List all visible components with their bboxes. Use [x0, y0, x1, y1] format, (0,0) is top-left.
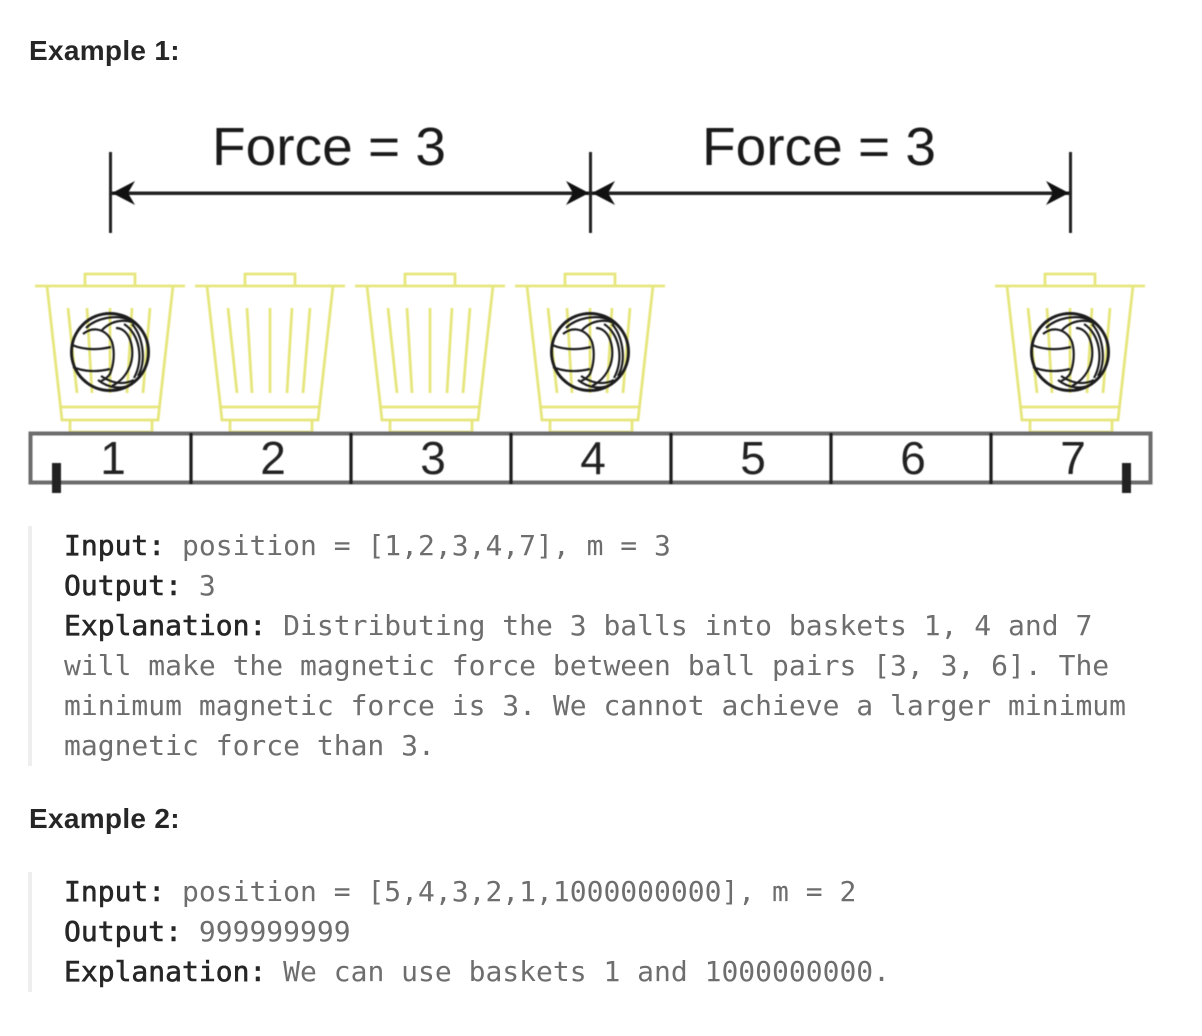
icon: ball in basket 7 — [1032, 314, 1108, 390]
icon: ball in basket 1 — [72, 314, 148, 390]
text block: example 1 details: Input: position = [1,2,3,4,7], m = 3 Output: 3 Explanation: Distributing the 3 balls into baskets 1, 4 and 7 will make the magnetic force between ball pairs [3, 3, 6]. The minimum magnetic force is 3. We cannot achieve a larger minimum magnetic force than 3. — [64, 529, 1126, 762]
icon: basket 3 — [355, 274, 505, 432]
number line: positions 1 to 7: 1 — [100, 432, 126, 484]
number line: positions 1 to 7: 7 — [1060, 432, 1086, 484]
icon: ball in basket 4 — [552, 314, 628, 390]
label: first force: Force = 3 — [212, 117, 446, 177]
heading: Example 2: Example 2: — [29, 803, 180, 834]
number line: positions 1 to 7: 5 — [740, 432, 766, 484]
number line: positions 1 to 7: 6 — [900, 432, 926, 484]
blockquote bar: example 2 — [28, 872, 32, 992]
number line: positions 1 to 7: 2 — [260, 432, 286, 484]
icon: basket 7 — [995, 274, 1145, 432]
number line: positions 1 to 7 — [30, 432, 1150, 493]
number line: positions 1 to 7: 4 — [580, 432, 606, 484]
label: second force: Force = 3 — [702, 117, 936, 177]
number line: positions 1 to 7: 3 — [420, 432, 446, 484]
icon: basket 2 — [195, 274, 345, 432]
icon: basket 4 — [515, 274, 665, 432]
blockquote bar: example 1 — [28, 526, 32, 766]
icon: basket 1 — [35, 274, 185, 432]
text block: example 2 details: Input: position = [5,4,3,2,1,1000000000], m = 2 Output: 999999999 Explanation: We can use baskets 1 and 1000000000. — [64, 875, 890, 988]
diagram: baskets and magnetic force — [28, 117, 1154, 494]
arrows: force dimension lines — [109, 152, 1072, 233]
heading: Example 1: Example 1: — [29, 35, 180, 66]
